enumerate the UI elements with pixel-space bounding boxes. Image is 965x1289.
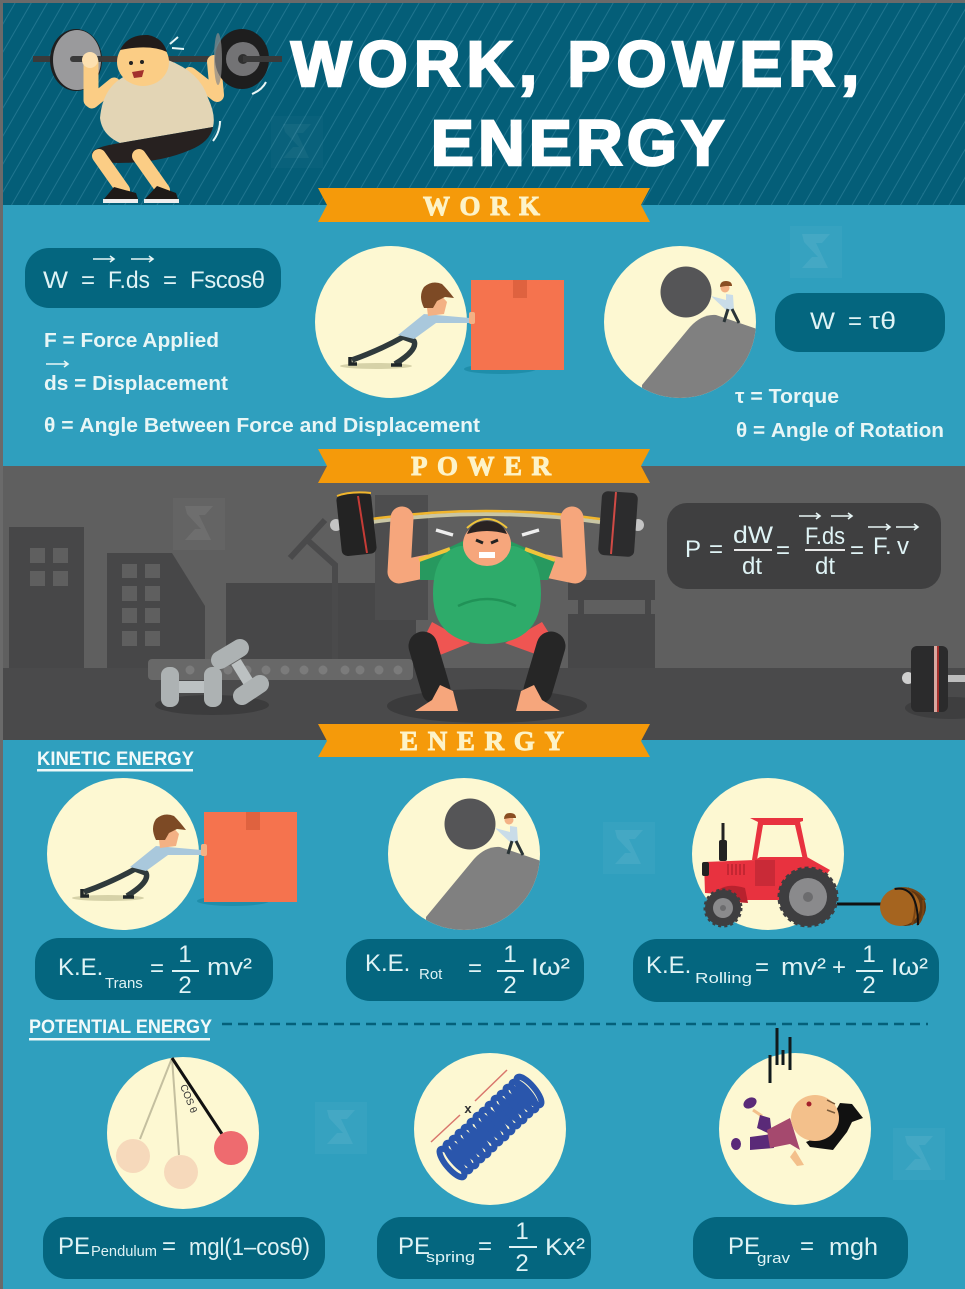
illustration: pendulum	[107, 1057, 259, 1209]
torque definitions: θ = Angle of Rotation	[736, 420, 944, 442]
illustration: tractor pulling barrel	[692, 778, 926, 930]
formula pill: PE spring: 2	[515, 1250, 529, 1277]
formula pill: KE rotational: 1	[503, 941, 517, 968]
illustration: pendulum: COS θ	[177, 1083, 199, 1115]
illustration: spring	[414, 1053, 566, 1205]
ribbon: energy	[318, 724, 650, 757]
icon: barbell plate on floor	[902, 646, 965, 719]
formula pill: KE translational: 1	[178, 941, 192, 968]
formula pill: KE translational: Trans	[105, 975, 143, 992]
formula pill: power: dW	[733, 522, 773, 549]
formula pill: PE pendulum: PE	[58, 1233, 90, 1260]
watermark	[315, 1102, 367, 1154]
formula pill: KE rolling: 2	[862, 972, 876, 999]
formula pill: KE translational: =	[150, 955, 164, 982]
formula pill: power: =	[709, 536, 723, 563]
illustration: pushing box, kinetic	[47, 778, 297, 930]
formula pill: KE translational: K.E.	[58, 954, 103, 981]
formula pill: torque work: τθ	[869, 308, 896, 335]
illustration: man pushing box	[315, 246, 564, 398]
title: WORK, POWER,	[291, 28, 859, 100]
title: ENERGY	[431, 107, 724, 179]
illustration: falling boy	[719, 1028, 871, 1205]
ribbon: energy: ENERGY	[400, 726, 564, 756]
formula pill: KE rolling: Iω²	[891, 954, 928, 981]
ribbon: work	[318, 188, 650, 222]
formula pill: KE rolling: K.E.	[646, 952, 691, 979]
formula pill: PE pendulum: Pendulum	[91, 1243, 157, 1260]
formula pill: KE translational	[35, 938, 273, 1000]
formula pill: power: dt	[742, 553, 762, 580]
formula pill: PE pendulum: mgl(1–cosθ)	[189, 1234, 310, 1261]
formula pill: KE rotational: Iω²	[531, 954, 570, 981]
formula pill: work: W	[43, 267, 68, 294]
left page edge	[0, 0, 3, 1289]
formula pill: PE spring: 1	[515, 1218, 529, 1245]
formula pill: KE rotational: Rot	[419, 966, 443, 983]
formula pill: work: Fscosθ	[190, 267, 265, 294]
ribbon: power: POWER	[411, 451, 552, 481]
heading: potential energy: POTENTIAL ENERGY	[29, 1017, 212, 1038]
watermark	[893, 1128, 945, 1180]
formula pill: power: dt	[815, 553, 835, 580]
formula pill: work: F.ds	[108, 267, 150, 294]
formula pill: PE spring: PE	[398, 1233, 430, 1260]
formula pill: power: P	[685, 536, 701, 563]
formula pill: KE rotational: =	[468, 955, 482, 982]
formula pill: KE rotational	[346, 939, 584, 1001]
power band	[3, 466, 965, 740]
ribbon: power	[318, 449, 650, 483]
torque definitions	[735, 386, 944, 442]
formula pill: torque work	[775, 293, 945, 352]
formula pill: power: F.	[873, 533, 892, 560]
work definitions: θ = Angle Between Force and Displacement	[44, 415, 480, 437]
dashed divider	[222, 1023, 928, 1025]
title	[291, 28, 859, 179]
illustration: man lifting barbell overhead	[330, 491, 644, 723]
icon: dumbbells	[155, 648, 269, 715]
header band	[0, 0, 965, 205]
illustration: boulder, kinetic	[388, 778, 544, 932]
energy background	[3, 740, 965, 1289]
formula pill: PE gravity: PE	[728, 1233, 760, 1260]
formula pill: power	[667, 503, 941, 589]
formula pill: PE gravity	[693, 1217, 908, 1279]
formula pill: power: F.ds	[805, 523, 845, 550]
formula pill: KE translational: 2	[178, 972, 192, 999]
illustration: spring: x	[464, 1101, 472, 1116]
formula pill: KE rolling: +	[832, 954, 846, 981]
formula pill: KE rolling: =	[755, 954, 769, 981]
work definitions	[44, 330, 480, 437]
formula pill: PE spring: =	[478, 1233, 492, 1260]
formula pill: PE spring: Kx²	[545, 1234, 585, 1261]
work definitions: ds = Displacement	[44, 373, 228, 395]
formula pill: KE rotational: K.E.	[365, 950, 410, 977]
work definitions: F = Force Applied	[44, 330, 219, 352]
formula pill: PE pendulum: =	[162, 1233, 176, 1260]
formula pill: power: =	[850, 537, 864, 564]
formula pill: KE rolling: mv²	[781, 954, 826, 981]
formula pill: KE rolling: Rolling	[695, 970, 752, 987]
formula pill: PE spring	[377, 1217, 591, 1279]
formula pill: PE pendulum	[43, 1217, 325, 1279]
formula pill: KE rotational: 2	[503, 972, 517, 999]
formula pill: PE gravity: =	[800, 1233, 814, 1260]
formula pill: torque work: W	[810, 308, 835, 335]
illustration: man squatting with barbell	[33, 29, 282, 203]
formula pill: PE gravity: grav	[757, 1250, 791, 1267]
formula pill: PE gravity: mgh	[829, 1234, 878, 1261]
watermark	[603, 822, 655, 874]
formula pill: torque work: =	[848, 308, 862, 335]
formula pill: work: =	[163, 267, 177, 294]
torque definitions: τ = Torque	[735, 386, 839, 408]
ribbon: work: WORK	[423, 191, 540, 221]
heading: kinetic energy: KINETIC ENERGY	[37, 749, 194, 770]
formula pill: KE rolling: 1	[862, 941, 876, 968]
formula pill: power: =	[776, 537, 790, 564]
formula pill: KE translational: mv²	[207, 954, 252, 981]
formula pill: PE spring: spring	[426, 1249, 475, 1266]
illustration: man rolling boulder uphill	[604, 246, 760, 400]
formula pill: work: =	[81, 267, 95, 294]
formula pill: power: v	[897, 533, 909, 560]
watermark	[790, 226, 842, 278]
formula pill: KE rolling	[633, 939, 939, 1002]
formula pill: work	[25, 248, 281, 308]
